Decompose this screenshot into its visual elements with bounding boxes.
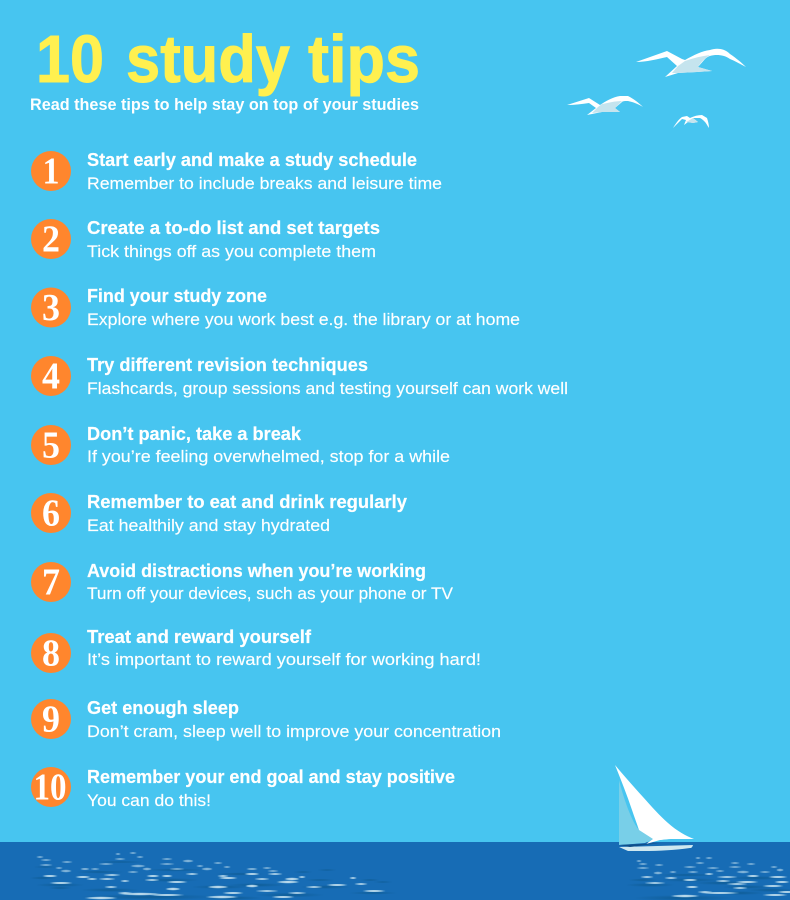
tip 1: Remember to include breaks and leisure time (87, 174, 442, 193)
tip 2 (31, 218, 380, 261)
tip 8: It’s important to reward yourself for working hard! (87, 650, 481, 669)
tip 1: Start early and make a study schedule (87, 150, 417, 170)
tip 9 (31, 698, 501, 741)
tip 2: Create a to-do list and set targets (87, 218, 380, 238)
tip 5: Don’t panic, take a break (87, 424, 302, 444)
tip 10: You can do this! (87, 791, 211, 810)
title (36, 22, 420, 97)
tip 5: If you’re feeling overwhelmed, stop for a while (87, 447, 450, 466)
tip 1 (31, 150, 442, 193)
tip 4 (31, 355, 568, 398)
number badge 9: 9 (42, 698, 60, 740)
water reflections left (29, 852, 398, 900)
icon: medium seagull (567, 96, 643, 115)
tip 6: Remember to eat and drink regularly (87, 492, 407, 512)
water reflections right (625, 857, 790, 900)
number badge 2 (31, 218, 71, 260)
number badge 3: 3 (42, 287, 60, 329)
tip 3 (31, 286, 520, 329)
number badge 6 (31, 492, 71, 534)
tip 8: Treat and reward yourself (87, 627, 312, 647)
tip 10: Remember your end goal and stay positive (87, 767, 455, 787)
number badge 4: 4 (42, 356, 60, 398)
tip 4: Flashcards, group sessions and testing yourself can work well (87, 379, 568, 398)
main sail (615, 765, 694, 844)
icon: small seagull (673, 115, 709, 128)
tip 10 (31, 766, 455, 810)
number badge 6: 6 (42, 492, 60, 534)
tip 5 (31, 424, 450, 466)
number badge 8: 8 (42, 632, 60, 674)
tip 7 (31, 561, 454, 604)
number badge 1: 1 (42, 150, 60, 192)
number badge 9 (31, 698, 71, 740)
back sail (619, 780, 653, 845)
tip 9: Don’t cram, sleep well to improve your concentration (87, 722, 501, 741)
sailboat (615, 765, 694, 851)
number badge 10: 10 (34, 766, 66, 808)
number badge 2: 2 (42, 218, 60, 260)
tip 6: Eat healthily and stay hydrated (87, 516, 330, 535)
sea (0, 842, 790, 900)
title: 10 (36, 22, 104, 97)
number badge 5: 5 (42, 424, 60, 466)
tip 4: Try different revision techniques (87, 355, 368, 375)
number badge 5 (31, 424, 71, 466)
number badge 3 (31, 287, 71, 329)
subtitle: Read these tips to help stay on top of your studies (30, 96, 419, 114)
title: study (126, 22, 290, 97)
number badge 4 (31, 356, 71, 398)
tip 2: Tick things off as you complete them (87, 242, 376, 261)
tip 3: Explore where you work best e.g. the library or at home (87, 310, 520, 329)
tip 7: Avoid distractions when you’re working (87, 561, 426, 581)
title: tips (308, 22, 420, 97)
number badge 8 (31, 632, 71, 674)
tip 9: Get enough sleep (87, 698, 239, 718)
icon: large seagull (636, 49, 746, 77)
tip 7: Turn off your devices, such as your phone or TV (87, 584, 454, 603)
number badge 1 (31, 150, 71, 192)
number badge 7 (31, 562, 71, 604)
hull (619, 845, 693, 851)
number badge 7: 7 (42, 562, 60, 604)
tip 6 (31, 492, 407, 535)
tip 8 (31, 627, 481, 674)
tip 3: Find your study zone (87, 286, 267, 306)
